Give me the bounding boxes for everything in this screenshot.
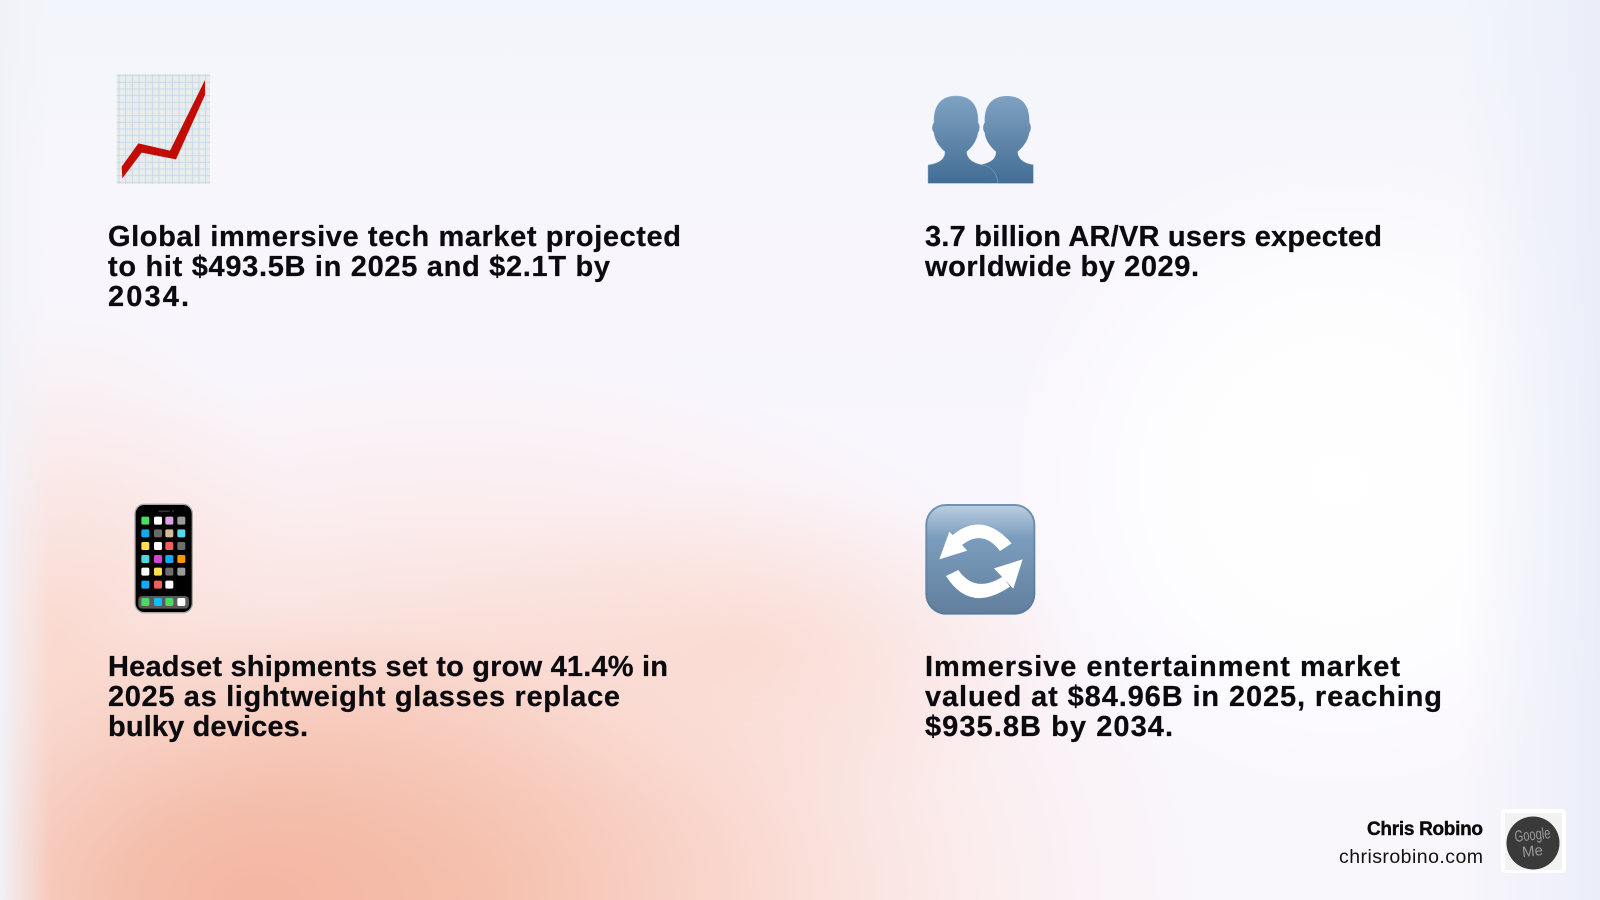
icon: sync arrows bbox=[925, 504, 1035, 615]
author name: Chris Robino bbox=[1367, 819, 1483, 840]
text: market projection: to hit $493.5B in 2025 and $2.1T by bbox=[108, 251, 610, 283]
panel: users bbox=[924, 96, 1382, 283]
text: market projection: Global immersive tech market projected bbox=[108, 221, 681, 253]
author credit bbox=[1339, 809, 1566, 873]
logo badge bbox=[1501, 809, 1566, 873]
icon: two silhouettes bbox=[928, 96, 1033, 183]
panel: market growth bbox=[108, 74, 681, 313]
text: headset shipments: bulky devices. bbox=[108, 711, 308, 743]
panel: headset shipments bbox=[108, 504, 668, 743]
text: headset shipments bbox=[108, 651, 668, 743]
text: entertainment market bbox=[925, 651, 1442, 743]
text: market projection bbox=[108, 221, 681, 313]
icon: chart increasing bbox=[117, 74, 210, 184]
text: AR/VR users: worldwide by 2029. bbox=[924, 251, 1199, 283]
text: entertainment market: valued at $84.96B in 2025, reaching bbox=[925, 681, 1442, 713]
text: headset shipments: Headset shipments set to grow 41.4% in bbox=[108, 651, 668, 683]
panel: entertainment market bbox=[925, 504, 1442, 743]
text: AR/VR users bbox=[924, 221, 1382, 283]
text: AR/VR users: 3.7 billion AR/VR users expected bbox=[925, 221, 1382, 253]
text: headset shipments: 2025 as lightweight glasses replace bbox=[108, 681, 620, 713]
text: entertainment market: Immersive entertainment market bbox=[925, 651, 1400, 683]
logo badge: Me bbox=[1521, 842, 1544, 861]
icon: mobile phone bbox=[134, 504, 193, 613]
text: market projection: 2034. bbox=[108, 281, 189, 313]
text: entertainment market: $935.8B by 2034. bbox=[925, 711, 1173, 743]
logo badge: Google bbox=[1514, 825, 1551, 846]
author website: chrisrobino.com bbox=[1339, 846, 1483, 868]
